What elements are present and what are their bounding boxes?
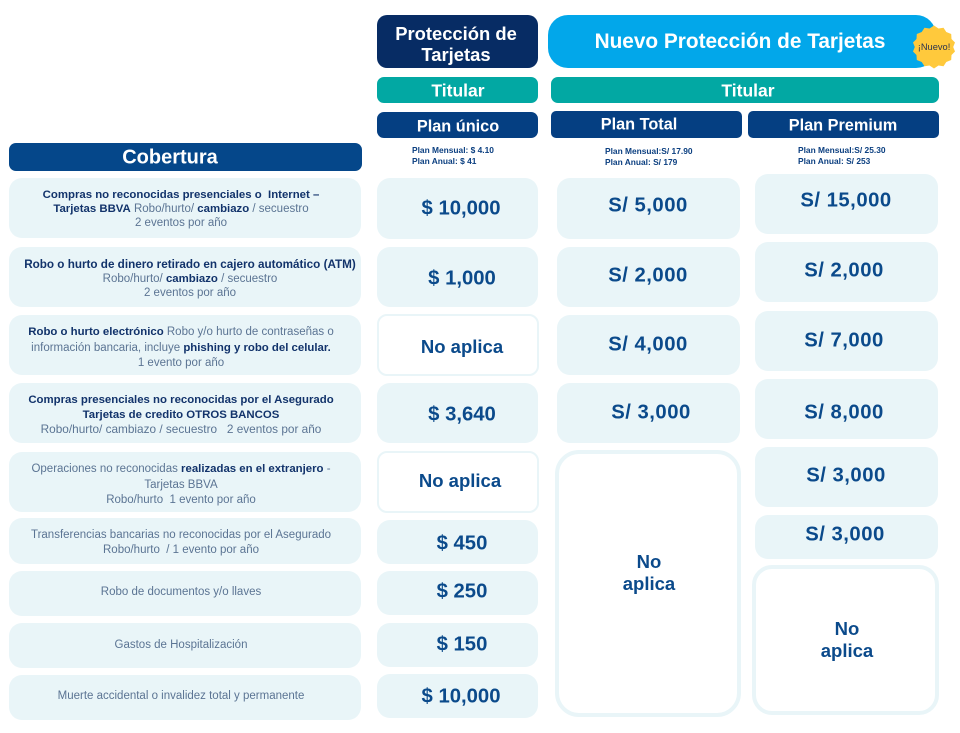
header: Nuevo Protección de Tarjetas: Nuevo Protección de Tarjetas xyxy=(595,30,885,53)
coverage row 5: Tarjetas BBVA xyxy=(144,478,218,490)
plan total value 1 xyxy=(557,178,740,239)
plan: Plan Premium: Plan Premium xyxy=(789,116,897,134)
plan premium value 1: S/ 15,000 xyxy=(800,190,892,212)
plan premium no aplica: aplica xyxy=(821,640,873,661)
icon: Nuevo badge: ¡Nuevo! xyxy=(918,42,950,52)
label: Titular right: Titular xyxy=(721,80,775,100)
plan único value 4: $ 3,640 xyxy=(428,404,496,426)
coverage row 7 xyxy=(9,571,361,616)
plan único value 6: $ 450 xyxy=(437,532,487,554)
plan premium value 3 xyxy=(755,311,938,371)
coverage row 3 xyxy=(9,315,361,375)
plan premium value 2 xyxy=(755,242,938,302)
price: Plan único xyxy=(412,145,494,166)
plan único value 8 xyxy=(377,623,538,667)
coverage row 6: Robo/hurto / 1 evento por año xyxy=(103,544,259,556)
coverage row 1: 2 eventos por año xyxy=(135,217,227,229)
plan único value 1: $ 10,000 xyxy=(422,198,500,220)
coverage row 2 xyxy=(9,247,361,307)
label: Titular left: Titular xyxy=(431,80,485,100)
coverage row 3: Robo o hurto electrónico Robo y/o hurto de contraseñas o xyxy=(28,326,334,338)
plan total value 2: S/ 2,000 xyxy=(608,264,688,286)
plan: Plan Total xyxy=(551,111,742,138)
plan único value 5 xyxy=(377,451,539,513)
coverage row 5: Robo/hurto 1 evento por año xyxy=(106,494,256,506)
coverage row 5: Operaciones no reconocidas realizadas en el extranjero - xyxy=(31,463,331,475)
plan total no aplica xyxy=(555,450,741,717)
coverage row 7: Robo de documentos y/o llaves xyxy=(101,586,261,598)
coverage row 9 xyxy=(9,675,361,720)
price: Plan Total: Plan Mensual:S/ 17.90 xyxy=(605,146,693,156)
price: Plan Premium xyxy=(798,145,886,166)
plan único value 6 xyxy=(377,520,538,564)
coverage row 8 xyxy=(9,623,361,668)
price: Plan Premium: Plan Anual: S/ 253 xyxy=(798,156,870,166)
plan: Plan único xyxy=(377,112,538,138)
heading: Cobertura: Cobertura xyxy=(122,146,218,168)
coverage row 4: Robo/hurto/ cambiazo / secuestro 2 eventos por año xyxy=(41,422,321,436)
plan único value 9: $ 10,000 xyxy=(422,686,500,708)
coverage row 4: Tarjetas de credito OTROS BANCOS xyxy=(83,408,279,420)
coverage row 1: Compras no reconocidas presenciales o Internet – xyxy=(43,189,319,201)
plan premium value 3: S/ 7,000 xyxy=(804,330,884,352)
plan único value 8: $ 150 xyxy=(437,634,487,656)
header: Protección de Tarjetas: Protección de xyxy=(395,23,517,44)
price: Plan único: Plan Anual: $ 41 xyxy=(412,156,476,166)
plan total value 3: S/ 4,000 xyxy=(608,334,688,356)
coverage row 4: Compras presenciales no reconocidas por el Asegurado xyxy=(28,394,334,406)
price: Plan Total: Plan Anual: S/ 179 xyxy=(605,157,677,167)
plan único value 2: $ 1,000 xyxy=(428,268,496,290)
plan premium no aplica xyxy=(752,565,939,715)
plan único value 7: $ 250 xyxy=(437,580,487,602)
heading: Cobertura xyxy=(9,143,362,171)
plan único value 4 xyxy=(377,383,538,443)
coverage row 5 xyxy=(9,452,361,512)
plan total no aplica: No xyxy=(637,551,661,572)
price: Plan Total xyxy=(605,146,693,167)
plan único value 7 xyxy=(377,571,538,615)
plan total value 2 xyxy=(557,247,740,307)
plan premium value 6: S/ 3,000 xyxy=(805,524,885,546)
plan premium value 4 xyxy=(755,379,938,439)
plan premium value 4: S/ 8,000 xyxy=(804,402,884,424)
coverage row 2: 2 eventos por año xyxy=(144,287,236,299)
label: Titular right xyxy=(551,77,939,103)
plan total no aplica: aplica xyxy=(623,573,675,594)
price: Plan Premium: Plan Mensual:S/ 25.30 xyxy=(798,145,886,155)
plan premium value 5 xyxy=(755,447,938,507)
plan total value 4: S/ 3,000 xyxy=(611,402,691,424)
plan único value 1 xyxy=(377,178,538,239)
coverage row 3: 1 evento por año xyxy=(138,357,224,369)
plan: Plan único: Plan único xyxy=(417,118,499,136)
coverage row 9: Muerte accidental o invalidez total y permanente xyxy=(58,690,304,702)
header: Protección de Tarjetas: Tarjetas xyxy=(421,44,491,65)
coverage row 4 xyxy=(9,383,361,443)
coverage row 1: Tarjetas BBVA Robo/hurto/ cambiazo / secuestro xyxy=(53,203,309,215)
plan: Plan Total: Plan Total xyxy=(601,116,677,134)
plan único value 3: No aplica xyxy=(421,336,503,357)
coverage row 2: Robo/hurto/ cambiazo / secuestro xyxy=(103,273,277,285)
price: Plan único: Plan Mensual: $ 4.10 xyxy=(412,145,494,155)
plan: Plan Premium xyxy=(748,111,939,138)
icon: Nuevo badge xyxy=(913,26,955,68)
coverage row 6 xyxy=(9,518,361,564)
plan total value 3 xyxy=(557,315,740,375)
coverage row 2: Robo o hurto de dinero retirado en cajero automático (ATM) xyxy=(24,258,356,271)
plan único value 9 xyxy=(377,674,538,718)
label: Titular left xyxy=(377,77,538,103)
coverage row 6: Transferencias bancarias no reconocidas por el Asegurado xyxy=(31,529,331,541)
coverage row 1 xyxy=(9,178,361,238)
header: Protección de Tarjetas xyxy=(377,15,538,68)
header: Nuevo Protección de Tarjetas xyxy=(548,15,936,68)
plan premium value 1 xyxy=(755,174,938,234)
plan único value 2 xyxy=(377,247,538,307)
plan único value 3 xyxy=(377,314,539,376)
plan premium value 6 xyxy=(755,515,938,559)
plan total value 1: S/ 5,000 xyxy=(608,194,688,216)
coverage row 3: información bancaria, incluye phishing y robo del celular. xyxy=(31,341,331,353)
coverage row 8: Gastos de Hospitalización xyxy=(115,639,247,651)
plan único value 5: No aplica xyxy=(419,470,501,491)
plan premium no aplica: No xyxy=(835,618,859,639)
plan total value 4 xyxy=(557,383,740,443)
plan premium value 2: S/ 2,000 xyxy=(804,260,884,282)
plan premium value 5: S/ 3,000 xyxy=(806,464,886,486)
